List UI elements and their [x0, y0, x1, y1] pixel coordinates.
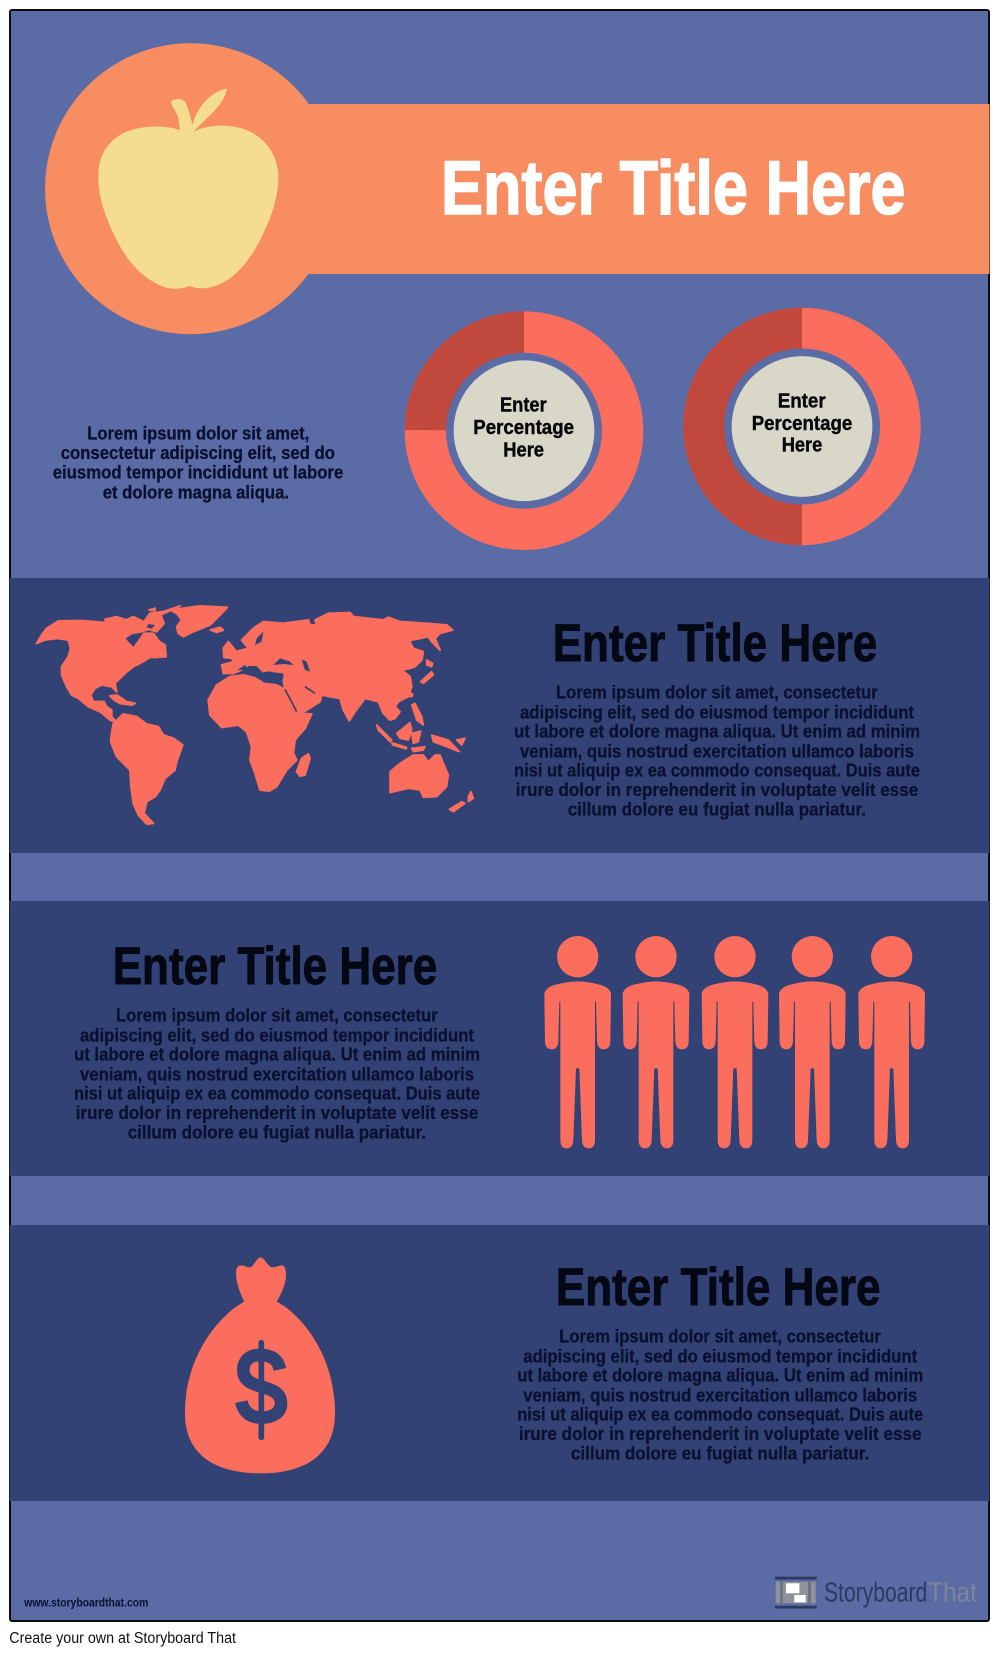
banner circle	[45, 43, 336, 334]
money section text: nisi ut aliquip ex ea commodo consequat. Duis aute	[517, 1404, 923, 1425]
icon: apple	[98, 88, 278, 289]
logo: Storyboard That	[775, 1577, 977, 1609]
donut 1 label: Enter	[500, 395, 547, 417]
people section text: adipiscing elit, sed do eiusmod tempor incididunt	[80, 1024, 475, 1045]
donut 2 label: Percentage	[752, 413, 852, 435]
people section text: irure dolor in reprehenderit in voluptate velit esse	[76, 1102, 478, 1123]
world section text: adipiscing elit, sed do eiusmod tempor incididunt	[520, 701, 915, 722]
donut 2 label: Enter	[778, 390, 826, 412]
money section text: irure dolor in reprehenderit in voluptate velit esse	[519, 1423, 922, 1444]
logo: Storyboard That: That	[928, 1577, 977, 1608]
people section title: Enter Title Here	[113, 937, 437, 996]
money section text: Lorem ipsum dolor sit amet, consectetur	[559, 1325, 882, 1346]
money section text: cillum dolore eu fugiat nulla pariatur.	[571, 1443, 869, 1464]
world section text	[514, 681, 920, 820]
intro text: eiusmod tempor incididunt ut labore	[53, 462, 343, 482]
icon: world map	[37, 606, 473, 824]
money section text: adipiscing elit, sed do eiusmod tempor incididunt	[523, 1345, 918, 1366]
money section text: veniam, quis nostrud exercitation ullamco laboris	[523, 1384, 917, 1405]
intro text	[53, 423, 343, 502]
world section text: ut labore et dolore magna aliqua. Ut enim ad minim	[514, 720, 920, 741]
website url: www.storyboardthat.com	[23, 1598, 148, 1610]
donut 1 label: Here	[503, 439, 544, 461]
donut 1 label	[473, 395, 574, 461]
panel: people section	[10, 901, 990, 1176]
donut chart 1	[405, 311, 643, 550]
world section text: Lorem ipsum dolor sit amet, consectetur	[556, 681, 878, 702]
people section text: cillum dolore eu fugiat nulla pariatur.	[128, 1122, 426, 1143]
money section text: ut labore et dolore magna aliqua. Ut enim ad minim	[517, 1364, 923, 1385]
world section text: veniam, quis nostrud exercitation ullamco laboris	[520, 740, 914, 761]
donut 2 label: Here	[782, 435, 822, 457]
logo: Storyboard That: Storyboard	[824, 1577, 927, 1608]
world section text: irure dolor in reprehenderit in voluptate velit esse	[516, 779, 918, 800]
world section title: Enter Title Here	[553, 614, 877, 673]
icon: five people	[544, 936, 925, 1148]
money section text	[517, 1325, 923, 1464]
panel: world section	[10, 578, 990, 853]
footer credit: Create your own at Storyboard That	[9, 1630, 237, 1647]
world section text: nisi ut aliquip ex ea commodo consequat. Duis aute	[514, 760, 920, 781]
donut 2 label	[752, 390, 852, 457]
people section text: veniam, quis nostrud exercitation ullamco laboris	[80, 1063, 474, 1084]
intro text: consectetur adipiscing elit, sed do	[61, 443, 335, 463]
panel: money section	[10, 1225, 990, 1501]
icon: money bag	[185, 1257, 335, 1473]
header banner	[45, 43, 990, 334]
people section text: ut labore et dolore magna aliqua. Ut enim ad minim	[74, 1043, 480, 1064]
banner title: Enter Title Here	[441, 146, 906, 231]
intro text: et dolore magna aliqua.	[103, 482, 289, 502]
people section text	[74, 1004, 480, 1143]
donut 1 label: Percentage	[473, 417, 574, 439]
people section text: nisi ut aliquip ex ea commodo consequat. Duis aute	[74, 1083, 480, 1104]
world section text: cillum dolore eu fugiat nulla pariatur.	[568, 799, 866, 820]
people section text: Lorem ipsum dolor sit amet, consectetur	[116, 1004, 438, 1025]
money section title: Enter Title Here	[556, 1258, 880, 1317]
donut chart 2	[683, 308, 921, 545]
banner strip	[290, 104, 990, 274]
intro text: Lorem ipsum dolor sit amet,	[87, 423, 309, 443]
